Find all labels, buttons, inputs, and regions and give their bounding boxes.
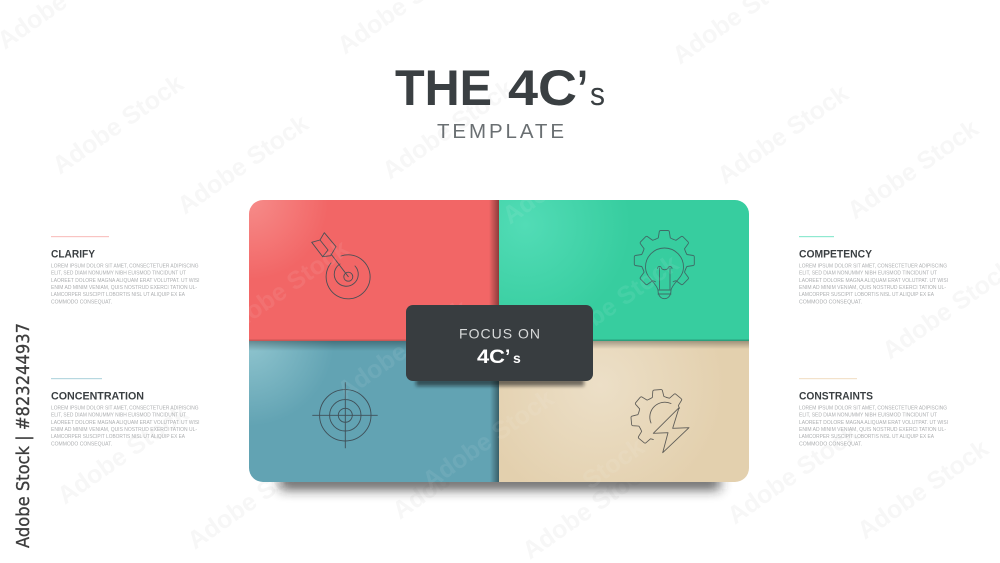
icon: gear with lightning bolt	[629, 388, 689, 453]
text block: constraints: CONSTRAINTS	[799, 390, 873, 402]
text block: competency: LAMCORPER SUSCIPIT LOBORTIS NISL UT ALIQUIP EX EA	[799, 292, 934, 298]
text block: competency: COMPETENCY	[799, 248, 873, 260]
text block: concentration: LOREM IPSUM DOLOR SIT AMET, CONSECTETUER ADIPISCING	[51, 406, 198, 412]
text block: clarify: LOREM IPSUM DOLOR SIT AMET, CONSECTETUER ADIPISCING	[51, 264, 198, 270]
text block: constraints	[799, 378, 948, 447]
watermark on page background: Adobe Stock	[377, 74, 519, 185]
title: s	[590, 76, 605, 112]
icon: crosshair target	[312, 382, 378, 448]
text block: competency	[799, 236, 948, 305]
icon: dart and target	[312, 233, 370, 299]
watermark on page background: Adobe Stock	[47, 69, 189, 180]
text block: competency: ELIT, SED DIAM NONUMMY NIBH EUISMOD TINCIDUNT UT	[799, 271, 938, 277]
watermark on page background: Adobe Stock	[182, 444, 324, 555]
panel: clarify	[249, 200, 499, 341]
text block: concentration: LAOREET DOLORE MAGNA ALIQUAM ERAT VOLUTPAT. UT WISI	[51, 420, 200, 426]
text block: competency: LOREM IPSUM DOLOR SIT AMET, CONSECTETUER ADIPISCING	[799, 264, 947, 270]
title: THE	[395, 60, 492, 116]
text block: competency: COMMODO CONSEQUAT.	[799, 299, 862, 305]
text block: constraints: LAOREET DOLORE MAGNA ALIQUAM ERAT VOLUTPAT. UT WISI	[799, 420, 948, 426]
text block: concentration: LAMCORPER SUSCIPIT LOBORTIS NISL UT ALIQUIP EX EA	[51, 434, 185, 440]
text block: concentration: COMMODO CONSEQUAT.	[51, 441, 112, 447]
text block: constraints: COMMODO CONSEQUAT.	[799, 441, 862, 447]
watermark over panels: Adobe	[497, 162, 577, 230]
stock credit: Adobe Stock | #823244937	[13, 323, 34, 548]
watermark on page background: Adobe Stock	[387, 414, 529, 525]
text block: constraints: ELIT, SED DIAM NONUMMY NIBH EUISMOD TINCIDUNT UT	[799, 413, 938, 419]
text block: competency: LAOREET DOLORE MAGNA ALIQUAM ERAT VOLUTPAT. UT WISI	[799, 278, 948, 284]
panel: constraints	[499, 341, 749, 482]
watermark over panels: Adobe Stock	[417, 384, 559, 495]
watermark on page background: Adobe Stock	[722, 419, 864, 530]
text block: constraints: LOREM IPSUM DOLOR SIT AMET, CONSECTETUER ADIPISCING	[799, 406, 947, 412]
text block: clarify: LAMCORPER SUSCIPIT LOBORTIS NISL UT ALIQUIP EX EA	[51, 292, 185, 298]
watermark over panels: Stock	[577, 433, 649, 495]
text block: concentration: CONCENTRATION	[51, 390, 144, 402]
text block: clarify: CLARIFY	[51, 248, 96, 260]
watermark on page background: Adobe Stock	[172, 109, 314, 220]
watermark over panels: Adobe Stock	[212, 234, 354, 345]
text block: concentration	[51, 378, 200, 447]
panel drop shadow	[280, 476, 720, 489]
panel: competency	[499, 200, 749, 341]
title: ’	[577, 60, 588, 116]
watermark on page background: Adobe Stock	[52, 399, 194, 510]
panel: concentration	[249, 341, 499, 482]
watermark on page background: Adobe Stock	[852, 434, 994, 545]
text block: clarify	[51, 236, 200, 305]
text block: constraints: ENIM AD MINIM VENIAM, QUIS NOSTRUD EXERCI TATION UL-	[799, 427, 946, 433]
watermark over panels	[212, 162, 684, 495]
subtitle: TEMPLATE	[437, 120, 564, 143]
text block: concentration: ENIM AD MINIM VENIAM, QUIS NOSTRUD EXERCI TATION UL-	[51, 427, 197, 433]
center label	[406, 305, 593, 386]
text block: constraints: LAMCORPER SUSCIPIT LOBORTIS NISL UT ALIQUIP EX EA	[799, 434, 934, 440]
text block: clarify: LAOREET DOLORE MAGNA ALIQUAM ERAT VOLUTPAT. UT WISI	[51, 278, 200, 284]
icon: lightbulb in gear	[634, 230, 694, 299]
center label: ’	[505, 347, 510, 368]
watermark on page background: Adobe Stock	[842, 114, 984, 225]
center label: s	[513, 350, 521, 366]
watermark over panels: Adobe Stock	[332, 294, 474, 405]
watermark on page background: Adobe Stock	[712, 79, 854, 190]
title	[395, 60, 605, 116]
center label: FOCUS ON	[459, 326, 540, 342]
center label: 4C	[477, 347, 505, 368]
watermark on page background: Adobe Stock	[517, 454, 659, 563]
text block: competency: ENIM AD MINIM VENIAM, QUIS NOSTRUD EXERCI TATION UL-	[799, 285, 946, 291]
text block: concentration: ELIT, SED DIAM NONUMMY NIBH EUISMOD TINCIDUNT UT	[51, 413, 186, 419]
text block: clarify: COMMODO CONSEQUAT.	[51, 299, 112, 305]
title: 4C	[508, 60, 577, 116]
text block: clarify: ENIM AD MINIM VENIAM, QUIS NOSTRUD EXERCI TATION UL-	[51, 285, 197, 291]
watermark over panels: Adobe Stock	[542, 249, 684, 360]
text block: clarify: ELIT, SED DIAM NONUMMY NIBH EUISMOD TINCIDUNT UT	[51, 271, 186, 277]
